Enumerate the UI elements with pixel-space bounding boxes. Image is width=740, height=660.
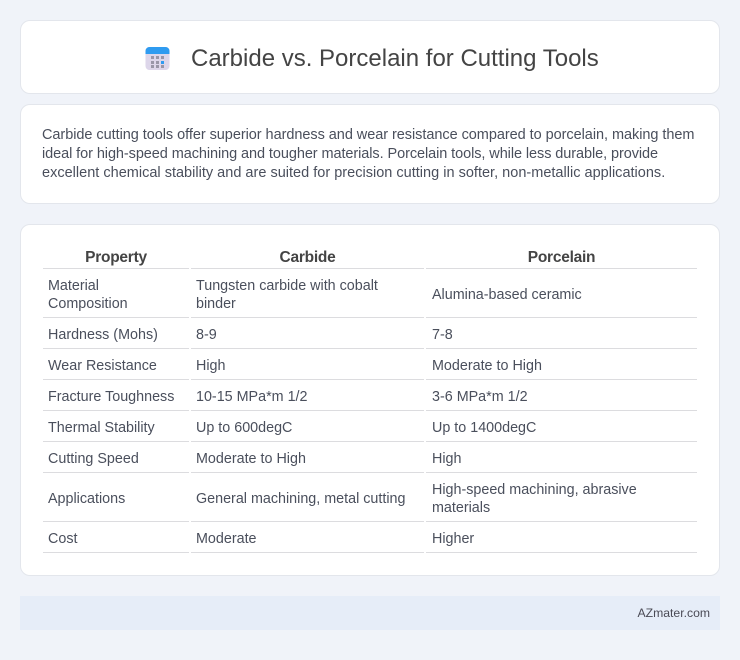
row: applications: Applications: [48, 491, 125, 507]
row: fracture toughness: Fracture Toughness: [48, 389, 174, 405]
comparison table: Alumina-based ceramic: [432, 287, 582, 303]
footer credit: AZmater.com: [638, 606, 710, 620]
comparison table: Up to 1400degC: [432, 420, 536, 436]
intro card: [20, 104, 720, 204]
intro text: ideal for high-speed machining and tougher materials. Porcelain tools, while less durable, provide: [42, 146, 658, 162]
header: Property: Property: [85, 249, 147, 266]
icon: calendar: [146, 47, 170, 70]
comparison table: High: [196, 358, 225, 374]
footer bar: [20, 596, 720, 630]
comparison table: Up to 600degC: [196, 420, 292, 436]
comparison table: Moderate to High: [432, 358, 542, 374]
title: Carbide vs. Porcelain for Cutting Tools: [191, 45, 599, 72]
header: Carbide: Carbide: [280, 249, 335, 266]
comparison table: High-speed machining, abrasive: [432, 482, 637, 498]
comparison table: Higher: [432, 531, 474, 547]
row: material composition: [48, 278, 128, 312]
intro text: Carbide cutting tools offer superior hardness and wear resistance compared to porcelain, making them: [42, 127, 694, 143]
comparison table: materials: [432, 500, 490, 516]
comparison table: 7-8: [432, 327, 453, 343]
row: thermal stability: Thermal Stability: [48, 420, 155, 436]
comparison table: Moderate: [196, 531, 257, 547]
comparison table: binder: [196, 296, 236, 312]
comparison table: Moderate to High: [196, 451, 306, 467]
row: wear resistance: Wear Resistance: [48, 358, 157, 374]
title card: [20, 20, 720, 94]
intro text: [42, 127, 694, 181]
row: material composition: Material: [48, 278, 99, 294]
row: cutting speed: Cutting Speed: [48, 451, 139, 467]
comparison table: 10-15 MPa*m 1/2: [196, 389, 308, 405]
comparison table: 3-6 MPa*m 1/2: [432, 389, 528, 405]
header: Porcelain: Porcelain: [528, 249, 595, 266]
comparison table: General machining, metal cutting: [196, 491, 405, 507]
comparison table: Tungsten carbide with cobalt: [196, 278, 378, 294]
intro text: excellent chemical stability and are suited for precision cutting in softer, non-metallic applications.: [42, 165, 665, 181]
row: hardness: Hardness (Mohs): [48, 327, 158, 343]
comparison table: [43, 249, 697, 553]
row: cost: Cost: [48, 531, 77, 547]
row: material composition: Composition: [48, 296, 128, 312]
comparison table: 8-9: [196, 327, 217, 343]
table card: [20, 224, 720, 576]
comparison table: High: [432, 451, 461, 467]
